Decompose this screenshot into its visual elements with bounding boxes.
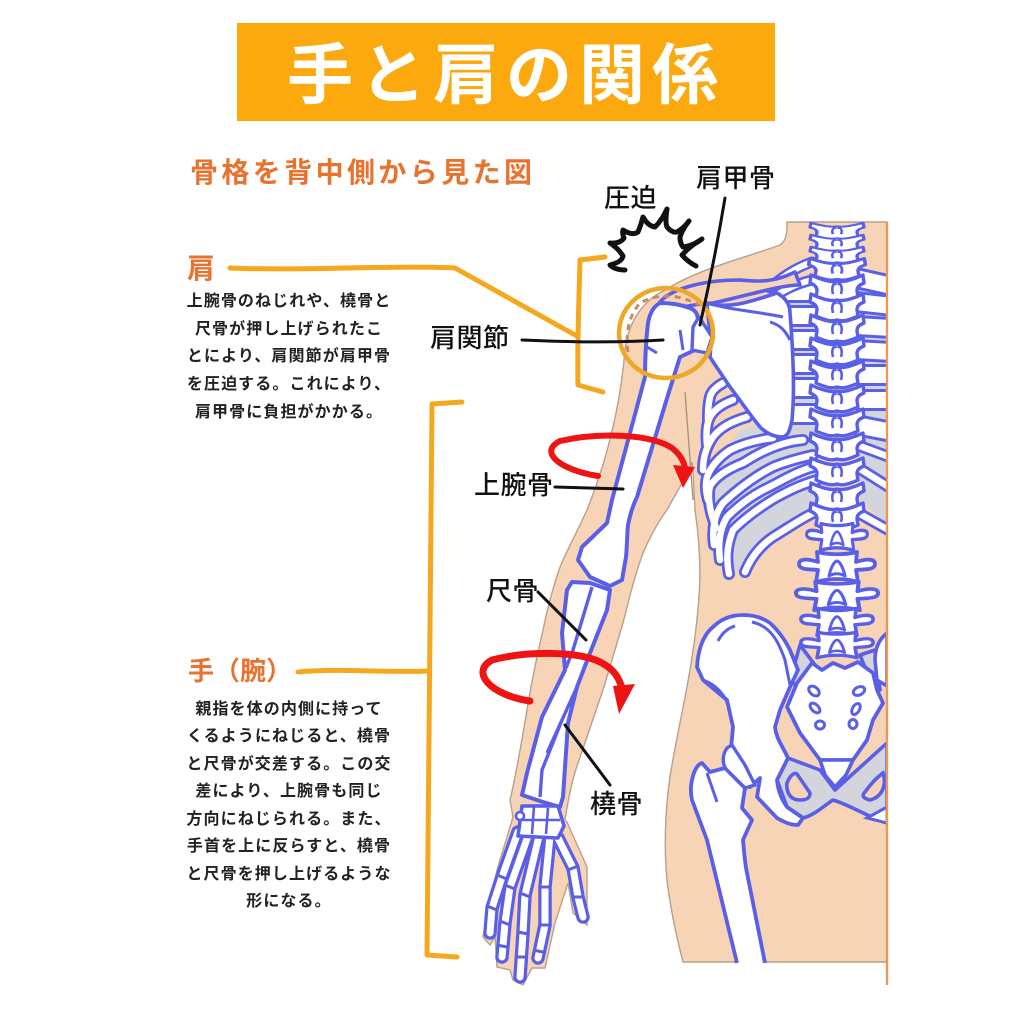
forearm inner lines xyxy=(540,587,592,797)
text block: hand and arm: 親指を体の内側に持って xyxy=(195,700,383,718)
body silhouette xyxy=(483,222,887,985)
text block: shoulder: 尺骨が押し上げられたこ xyxy=(195,319,383,338)
clavicle xyxy=(660,272,800,310)
text block: hand and arm: 手首を上に反らすと、橈骨 xyxy=(187,836,391,855)
rib head bands xyxy=(786,278,892,432)
labels: 肩甲骨 xyxy=(696,163,776,193)
scapula xyxy=(707,293,793,437)
title banner xyxy=(237,23,775,121)
humerus xyxy=(578,303,698,586)
sacral holes xyxy=(807,684,866,729)
ilium left xyxy=(697,615,803,825)
dashed scapula-contact arc xyxy=(627,296,699,352)
armpit line xyxy=(685,392,693,500)
title banner: 手と肩の関係 xyxy=(287,38,725,112)
coccyx xyxy=(820,760,853,787)
label lines xyxy=(522,198,725,785)
bracket: shoulder xyxy=(578,257,605,392)
right ilium xyxy=(875,633,887,686)
text block: shoulder: とにより、肩関節が肩甲骨 xyxy=(187,346,391,365)
spine xyxy=(796,223,878,658)
bracket: arm xyxy=(427,402,462,957)
text block: hand and arm: くるようにねじると、橈骨 xyxy=(187,726,391,745)
text block: shoulder: 肩甲骨に負担がかかる。 xyxy=(195,402,383,421)
femur xyxy=(691,763,765,963)
coracoid blob xyxy=(692,317,712,353)
text block: hand and arm: 方向にねじられる。また、 xyxy=(186,809,392,828)
lower right pubis xyxy=(867,807,887,823)
red rotation arrow lower xyxy=(483,653,635,714)
red rotation arrow upper xyxy=(551,436,695,488)
text block: hand and arm: 差により、上腕骨も同じ xyxy=(195,781,383,800)
pelvis gray region xyxy=(777,645,887,823)
femur inner stroke xyxy=(707,773,717,802)
labels: 圧迫 xyxy=(604,183,657,213)
shoulder joint circle xyxy=(619,288,713,378)
hand bones xyxy=(487,806,583,977)
text block: shoulder xyxy=(187,291,391,421)
obturator holes xyxy=(787,773,884,800)
forearm bones xyxy=(522,582,610,807)
ribs xyxy=(703,383,892,574)
ilium inner crest xyxy=(703,622,790,712)
text block: shoulder: 上腕骨のねじれや、橈骨と xyxy=(187,291,391,310)
labels: 尺骨 xyxy=(486,576,539,606)
icon: pressure burst xyxy=(610,209,702,270)
labels xyxy=(430,163,776,819)
text block: shoulder: を圧迫する。これにより、 xyxy=(187,375,391,393)
text block: hand and arm: 形になる。 xyxy=(246,892,332,910)
labels: 上腕骨 xyxy=(474,470,554,500)
text block: hand and arm xyxy=(186,700,392,910)
rib cage gray patches xyxy=(706,285,887,572)
text block: hand and arm: と尺骨が交差する。この交 xyxy=(186,754,392,773)
humerus head detail xyxy=(647,330,683,353)
subtitle: 骨格を背中側から見た図 xyxy=(190,157,535,188)
scapular spine xyxy=(712,306,790,341)
leader: shoulder heading xyxy=(230,267,575,335)
heading: hand and arm: 手（腕） xyxy=(188,656,292,686)
text block: hand and arm: と尺骨を押し上げるような xyxy=(186,865,392,883)
skeleton xyxy=(660,223,892,963)
upper ribs xyxy=(770,262,812,300)
leader: arm heading xyxy=(298,670,428,672)
ischium blob xyxy=(723,745,755,788)
sacrum xyxy=(787,662,883,760)
labels: 肩関節 xyxy=(430,323,510,353)
right edge line xyxy=(886,222,888,985)
heading: shoulder: 肩 xyxy=(187,253,215,284)
labels: 橈骨 xyxy=(590,789,643,819)
